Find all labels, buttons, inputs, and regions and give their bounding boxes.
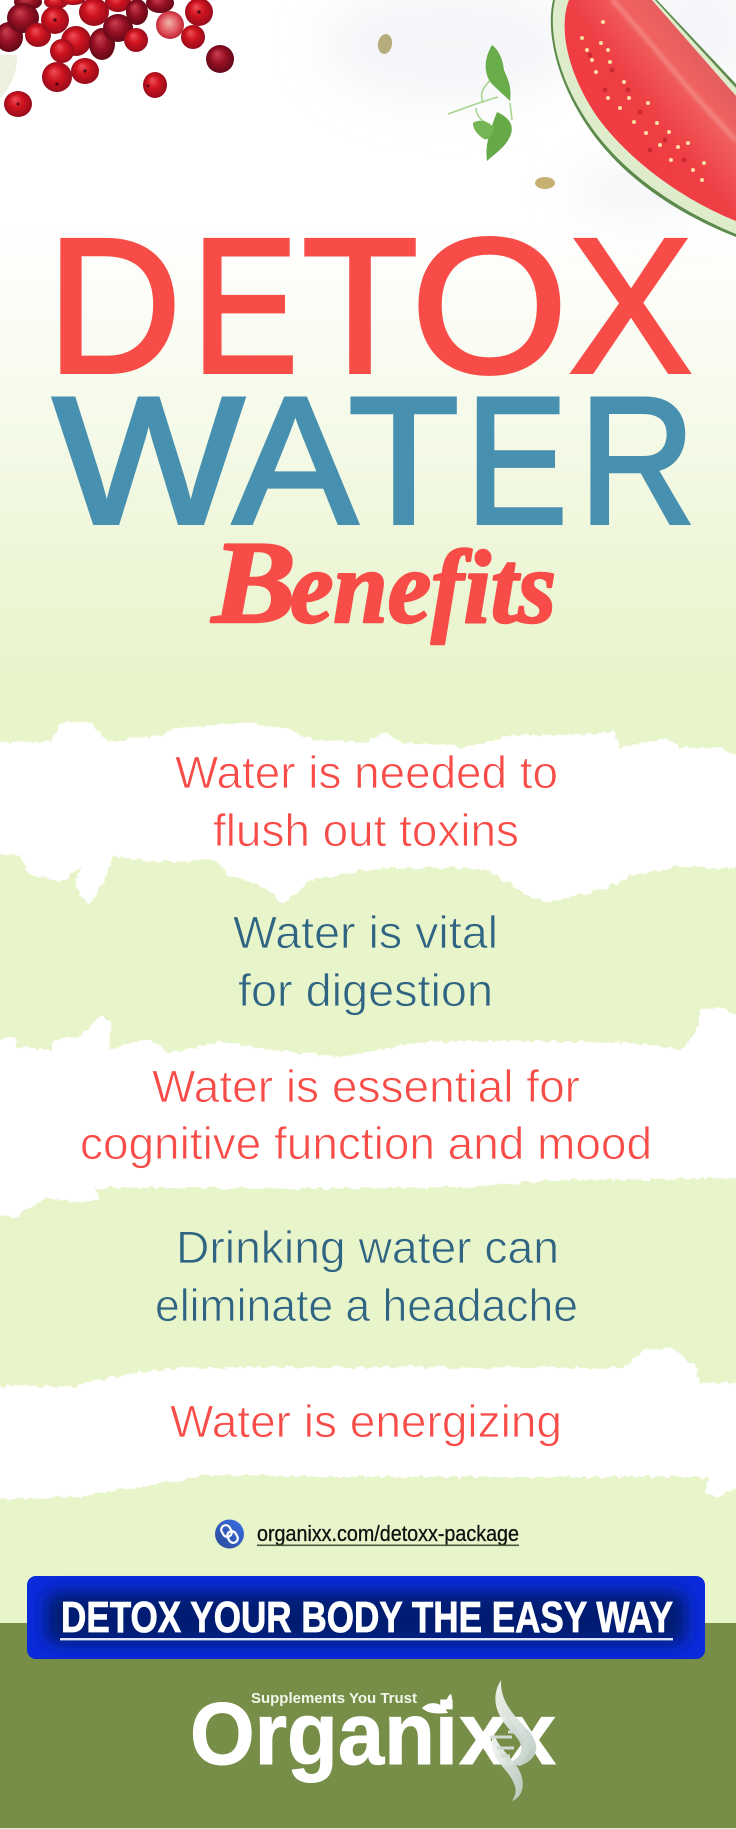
organixx logo	[190, 1680, 556, 1801]
bottom edge line	[0, 1828, 736, 1829]
logo wordmark: xx	[459, 1684, 556, 1783]
torn white band 1	[0, 722, 736, 905]
benefit 5: Water is energizing	[170, 1396, 562, 1447]
benefit 2: Water is vital	[233, 907, 498, 958]
website link: organixx.com/detoxx-package	[257, 1521, 519, 1546]
title word: DETOX	[47, 198, 692, 412]
benefits heading: B	[210, 517, 296, 648]
logo leaves	[422, 1694, 452, 1713]
title word: WATER: T	[348, 360, 459, 562]
benefit 2: for digestion	[238, 965, 493, 1016]
title word: WATER: R	[579, 360, 695, 562]
mint sprig	[448, 45, 512, 161]
title word: WATER	[50, 360, 695, 562]
benefit 1: flush out toxins	[213, 805, 519, 856]
title word: DETOX: D	[47, 198, 181, 412]
title word: DETOX: E	[192, 198, 298, 412]
logo tagline: Supplements You Trust	[251, 1691, 417, 1707]
title word: WATER: E	[466, 360, 568, 562]
benefits heading: enefits	[290, 530, 556, 645]
watermelon slice	[551, 0, 736, 237]
torn white band 2	[0, 1008, 736, 1217]
logo dna helix	[490, 1680, 536, 1801]
cranberries cluster	[0, 0, 234, 117]
benefit 1: Water is needed to	[175, 747, 558, 798]
benefit 3: Water is essential for	[152, 1061, 580, 1112]
call to action button	[27, 1576, 705, 1659]
torn white band 3	[0, 1348, 736, 1500]
benefit 4: Drinking water can	[176, 1222, 559, 1273]
logo wordmark: Organi	[190, 1684, 458, 1783]
benefit 3: cognitive function and mood	[80, 1118, 652, 1169]
soft grey tabletop shading	[320, 0, 736, 220]
green footer band	[0, 1623, 736, 1828]
benefit 4: eliminate a headache	[155, 1280, 578, 1331]
pumpkin seeds	[376, 33, 555, 189]
title word: DETOX: O	[411, 198, 568, 412]
title word: DETOX: X	[569, 198, 692, 412]
icon: link badge	[215, 1520, 244, 1548]
title word: DETOX: T	[302, 198, 418, 412]
title word: WATER: A	[233, 360, 357, 562]
title word: WATER: W	[53, 360, 244, 562]
